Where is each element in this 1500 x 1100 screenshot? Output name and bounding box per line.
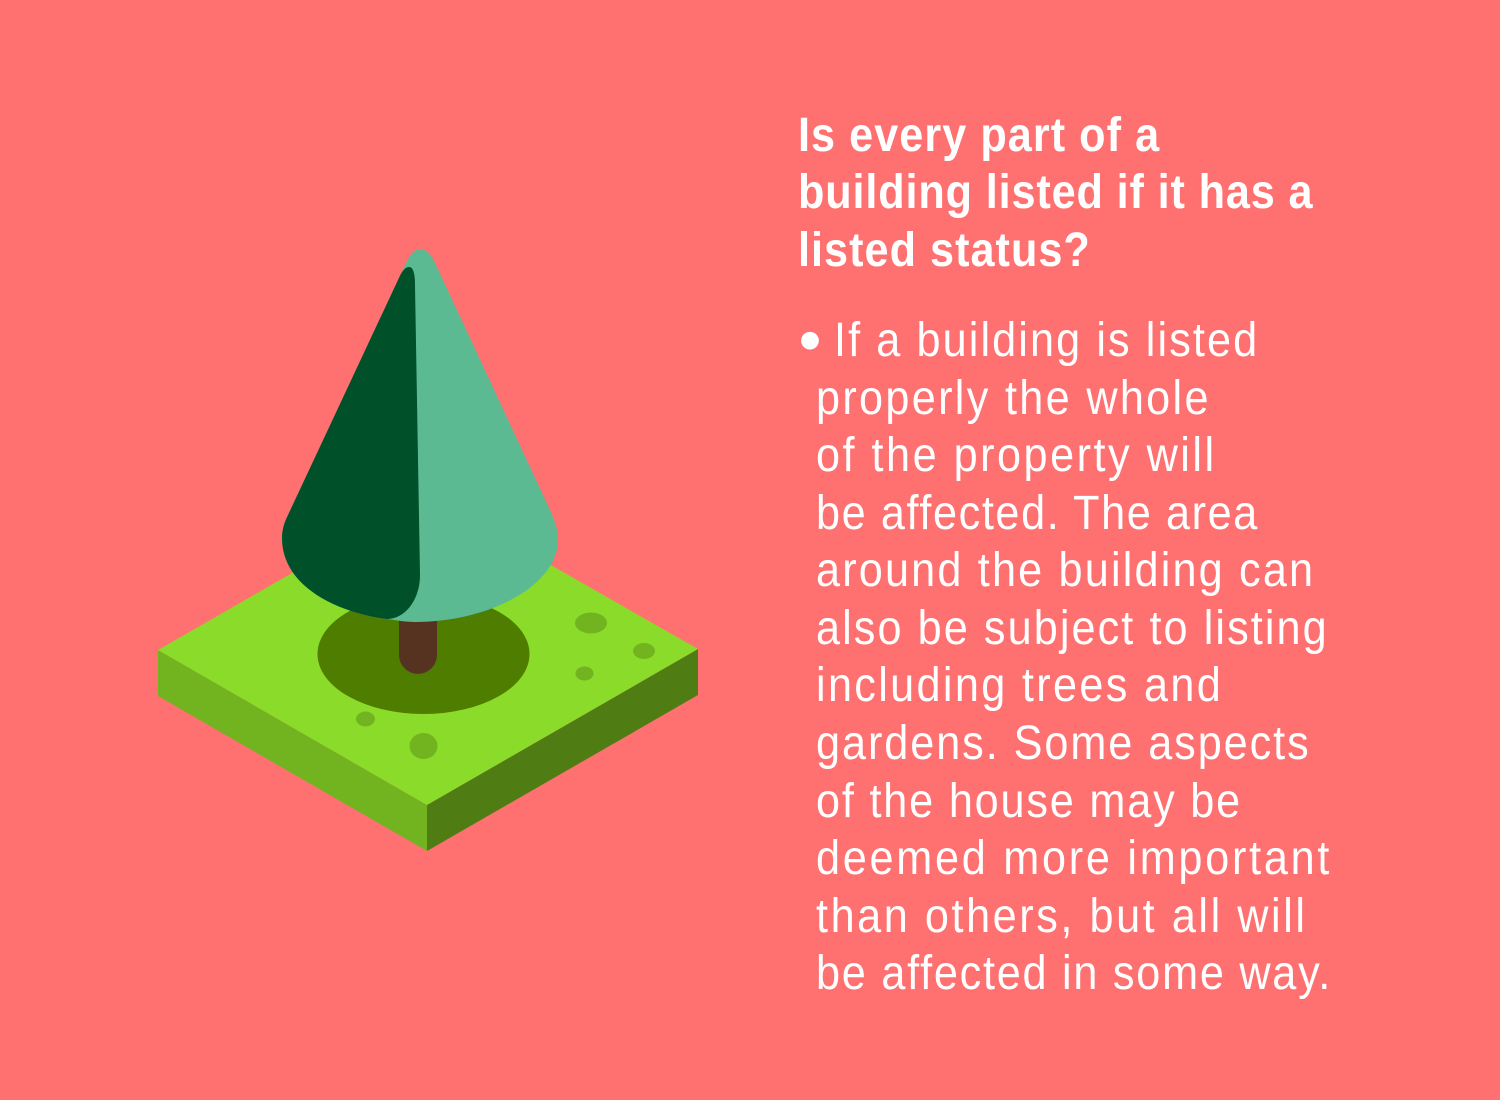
- tree foliage: [282, 249, 558, 622]
- body text: also be subject to listing: [816, 602, 1329, 655]
- tree shadow: [318, 594, 530, 714]
- body text: [799, 302, 1332, 1000]
- body text: •: [799, 302, 821, 376]
- body text: of the house may be: [816, 775, 1242, 828]
- body text: be affected in some way.: [816, 947, 1332, 1000]
- body text: of the property will: [816, 429, 1217, 482]
- body text: If a building is listed: [834, 314, 1259, 367]
- body text: including trees and: [816, 659, 1223, 712]
- tree trunk: [399, 610, 437, 674]
- body text: be affected. The area: [816, 487, 1259, 540]
- body text: properly the whole: [816, 372, 1211, 425]
- body text: gardens. Some aspects: [816, 717, 1311, 770]
- heading: building listed if it has a: [798, 166, 1313, 219]
- grass tufts: [356, 612, 655, 759]
- illustration: tree on isometric grass tile: [158, 249, 698, 851]
- body text: than others, but all will: [816, 890, 1308, 943]
- heading: [798, 109, 1313, 277]
- heading: Is every part of a: [798, 109, 1160, 162]
- body text: deemed more important: [816, 832, 1332, 885]
- body text: around the building can: [816, 544, 1315, 597]
- heading: listed status?: [798, 224, 1091, 277]
- grass tile: [158, 495, 698, 851]
